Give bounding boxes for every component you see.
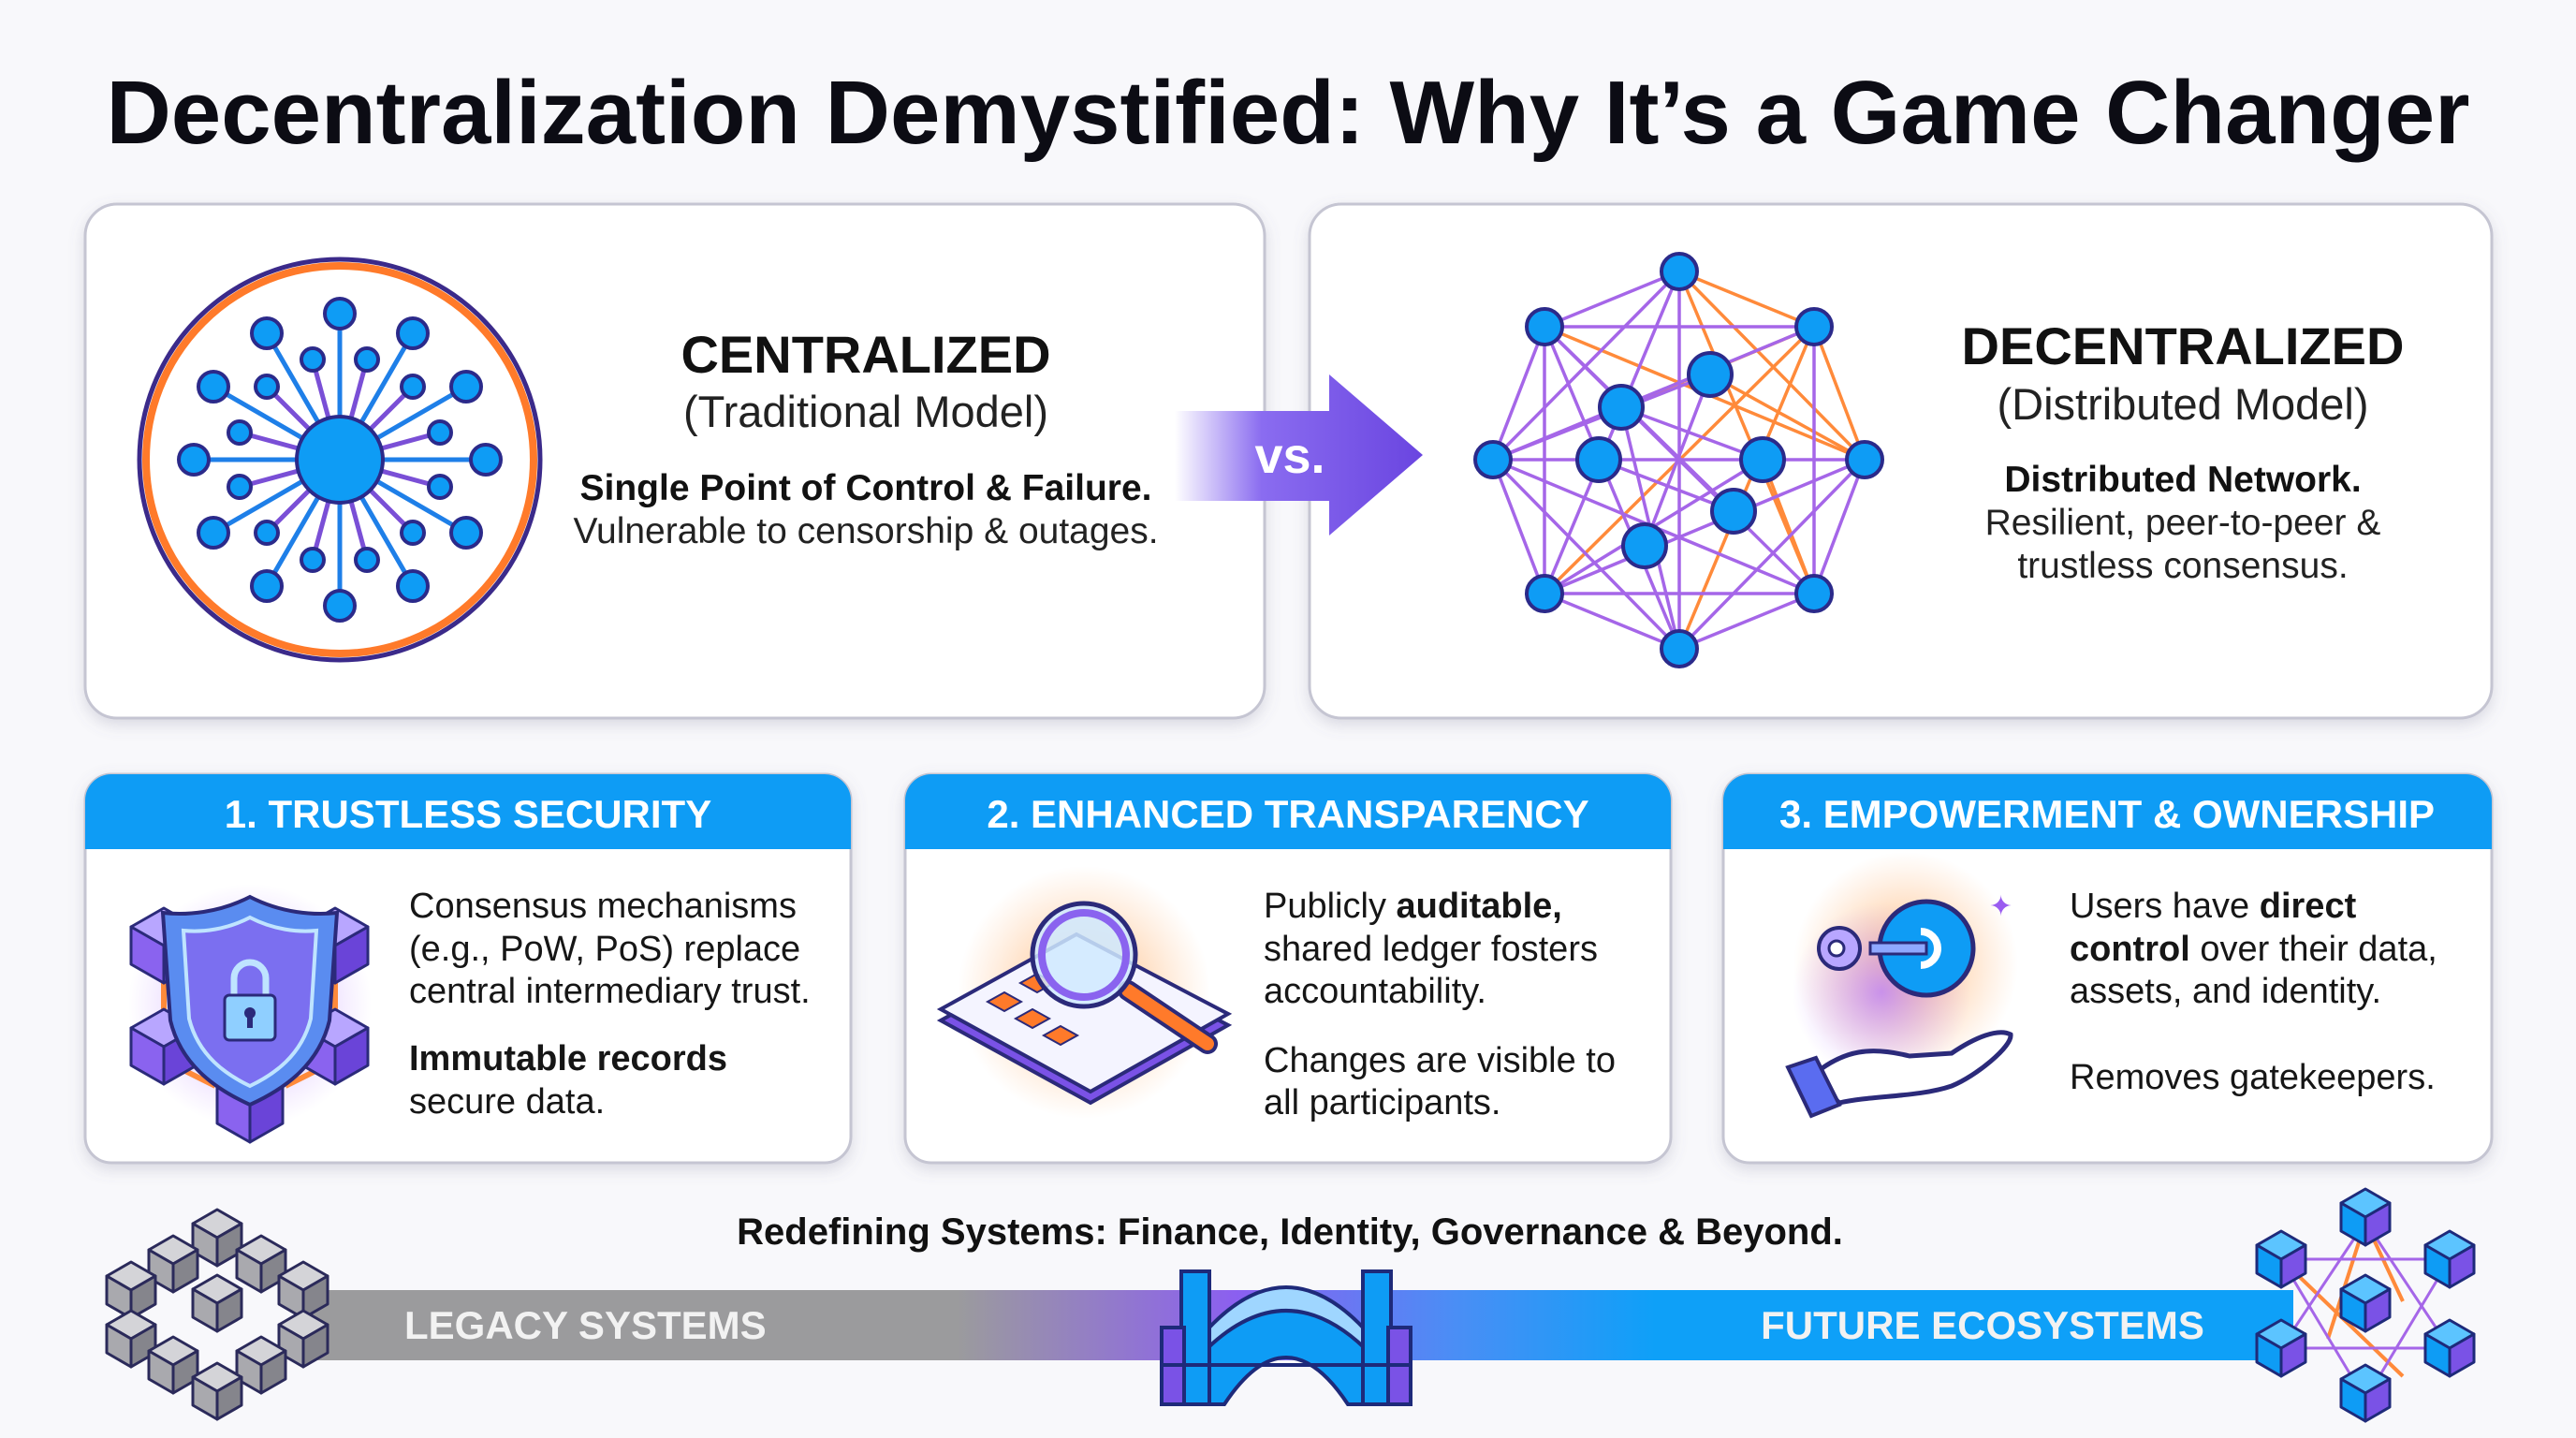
label: future ecosystems: FUTURE ECOSYSTEMS xyxy=(1761,1303,2204,1347)
arrow: vs xyxy=(1175,374,1423,536)
text block: trustless security: secure data. xyxy=(409,1082,605,1122)
text block: trustless security xyxy=(409,887,811,1122)
text block: centralized description xyxy=(573,468,1159,551)
text block: enhanced transparency: shared ledger fosters xyxy=(1264,930,1598,969)
text block: enhanced transparency xyxy=(1264,887,1616,1123)
label: legacy systems: LEGACY SYSTEMS xyxy=(404,1303,767,1347)
panel: enhanced transparency: 2. ENHANCED TRANSPARENCY xyxy=(987,792,1589,836)
caption: redefining systems: Redefining Systems: Finance, Identity, Governance & Beyond. xyxy=(737,1211,1843,1253)
arrow: vs: vs. xyxy=(1254,428,1325,484)
text block: empowerment: Removes gatekeepers. xyxy=(2070,1058,2436,1097)
icon: magnifier over ledger xyxy=(941,866,1228,1119)
text block: centralized description: Vulnerable to censorship & outages. xyxy=(573,511,1159,551)
subheading: traditional model: (Traditional Model) xyxy=(683,387,1048,436)
icon: key and hand: ✦ xyxy=(1989,891,2012,922)
icon: centralized hub xyxy=(139,259,540,660)
panel: trustless security xyxy=(85,774,851,1163)
text block: trustless security: Immutable records xyxy=(409,1039,727,1078)
heading band xyxy=(85,774,851,849)
heading: decentralized: DECENTRALIZED xyxy=(1962,316,2404,375)
text block: empowerment: control over their data, xyxy=(2070,930,2437,969)
text block: enhanced transparency: accountability. xyxy=(1264,972,1486,1011)
text block: trustless security: Consensus mechanisms xyxy=(409,887,797,926)
panel: decentralized xyxy=(1310,204,2492,718)
panel: enhanced transparency xyxy=(905,774,1671,1163)
heading: centralized: CENTRALIZED xyxy=(681,325,1051,384)
panel: centralized xyxy=(85,204,1265,718)
text block: enhanced transparency: Publicly auditable, xyxy=(1264,887,1562,926)
text block: empowerment xyxy=(2070,887,2437,1097)
icon: key and hand xyxy=(1788,852,2018,1116)
title: Decentralization Demystified: Why It’s a Game Changer xyxy=(106,63,2470,163)
text block: trustless security: central intermediary trust. xyxy=(409,972,811,1011)
icon: legacy cubes xyxy=(107,1210,328,1419)
icon: decentralized network xyxy=(1475,254,1882,667)
text block: decentralized description: trustless consensus. xyxy=(2017,546,2349,586)
text block: centralized description: Single Point of Control & Failure. xyxy=(580,468,1151,508)
subheading: distributed model: (Distributed Model) xyxy=(1997,379,2369,429)
panel: empowerment & ownership xyxy=(1723,774,2492,1163)
icon: future cubes network xyxy=(2257,1189,2474,1421)
text block: decentralized description: Distributed Network. xyxy=(2004,460,2362,500)
text block: enhanced transparency: all participants. xyxy=(1264,1083,1500,1123)
transition bar xyxy=(300,1290,2293,1360)
text block: empowerment: assets, and identity. xyxy=(2070,972,2381,1011)
text block: empowerment: Users have direct xyxy=(2070,887,2357,926)
text block: decentralized description: Resilient, peer-to-peer & xyxy=(1985,503,2380,543)
text block: enhanced transparency: Changes are visible to xyxy=(1264,1041,1616,1080)
heading band xyxy=(1723,774,2492,849)
heading band xyxy=(905,774,1671,849)
panel: empowerment & ownership: 3. EMPOWERMENT & OWNERSHIP xyxy=(1779,792,2435,836)
text block: decentralized description xyxy=(1985,460,2380,586)
icon: shield with blockchain xyxy=(128,884,372,1142)
panel: trustless security: 1. TRUSTLESS SECURITY xyxy=(225,792,711,836)
text block: trustless security: (e.g., PoW, PoS) replace xyxy=(409,930,800,969)
icon: bridge xyxy=(1162,1271,1411,1404)
